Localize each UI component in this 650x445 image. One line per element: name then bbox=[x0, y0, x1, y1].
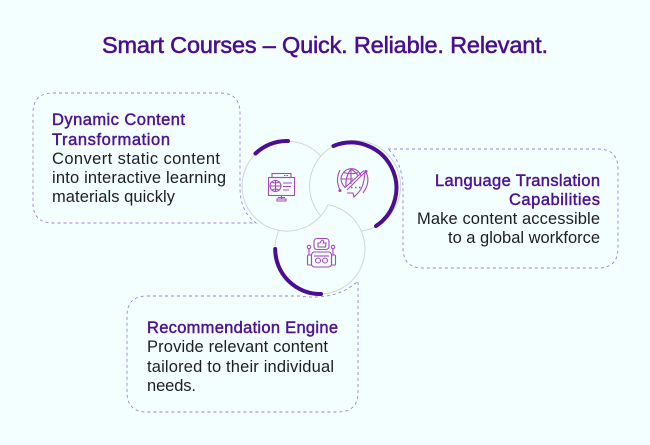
panel: dynamic content transformation bbox=[33, 93, 256, 223]
panel: language translation capabilities bbox=[388, 149, 618, 268]
panel: dynamic content transformation: into interactive learning bbox=[52, 169, 226, 187]
circle: language translation bbox=[310, 141, 401, 231]
icon: robot with thumbs up bbox=[307, 238, 336, 267]
panel: language translation capabilities: Capabilities bbox=[509, 191, 600, 209]
icon: monitor with globe bbox=[268, 174, 294, 201]
panel: dynamic content transformation: Transformation bbox=[52, 131, 170, 149]
panel: recommendation engine bbox=[127, 281, 358, 412]
panel: language translation capabilities: to a global workforce bbox=[448, 229, 600, 247]
panel: recommendation engine: needs. bbox=[147, 377, 196, 395]
title: Smart Courses – Quick. Reliable. Relevant. bbox=[102, 32, 548, 58]
circle: dynamic content bbox=[242, 141, 328, 231]
panel: dynamic content transformation: Convert static content bbox=[52, 150, 220, 168]
circle: recommendation engine bbox=[275, 205, 365, 294]
panel: recommendation engine: Recommendation Engine bbox=[147, 319, 338, 337]
icon: globe and speech bubble bbox=[338, 169, 368, 197]
panel: language translation capabilities: Make content accessible bbox=[417, 210, 600, 228]
panel: recommendation engine: tailored to their individual bbox=[147, 358, 334, 376]
panel: recommendation engine: Provide relevant content bbox=[147, 338, 328, 356]
panel: dynamic content transformation: Dynamic Content bbox=[52, 111, 185, 129]
panel: dynamic content transformation: materials quickly bbox=[52, 188, 176, 206]
panel: language translation capabilities: Language Translation bbox=[435, 172, 600, 190]
